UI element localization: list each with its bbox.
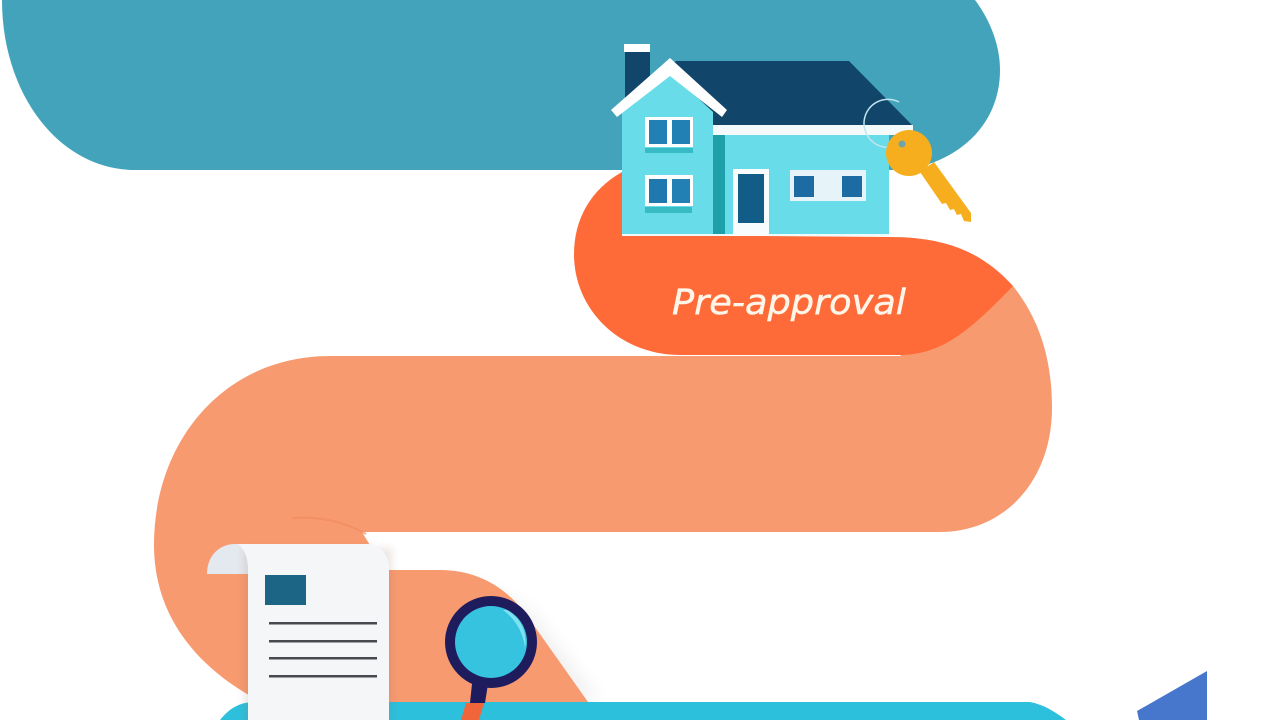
main roof [665,61,912,125]
eave trim [713,125,913,135]
wall shade strip [713,135,725,236]
subtle fold line on orange band [292,518,366,534]
document curl [207,544,250,574]
lens [455,606,527,678]
handle [461,703,484,720]
lens rim [445,596,537,688]
cyan path band [220,702,1066,720]
document shadow [244,548,392,720]
orange pre-approval band [574,172,1013,355]
blue arrow tip [1137,671,1207,720]
document text lines [269,622,377,678]
key ring [864,99,899,147]
door [733,169,769,236]
lower wing wall [713,135,889,235]
teal path band [2,0,1000,170]
lens highlight [503,610,526,648]
lower windows [645,175,693,213]
upper windows [645,117,693,153]
icon: document [207,544,392,720]
document sheet [238,544,389,720]
gable trim [611,58,727,117]
chimney [624,44,650,100]
document picture block [265,575,306,605]
base line [622,234,889,236]
icon: magnifying glass [445,596,537,720]
step label: Pre-approval: Pre-approval [672,283,906,323]
key [886,130,971,222]
upper wing wall [622,72,713,235]
light orange path band [154,286,1052,702]
icon: house with key [611,44,971,236]
shadow beside light orange slope [470,580,600,702]
side window [790,170,866,201]
